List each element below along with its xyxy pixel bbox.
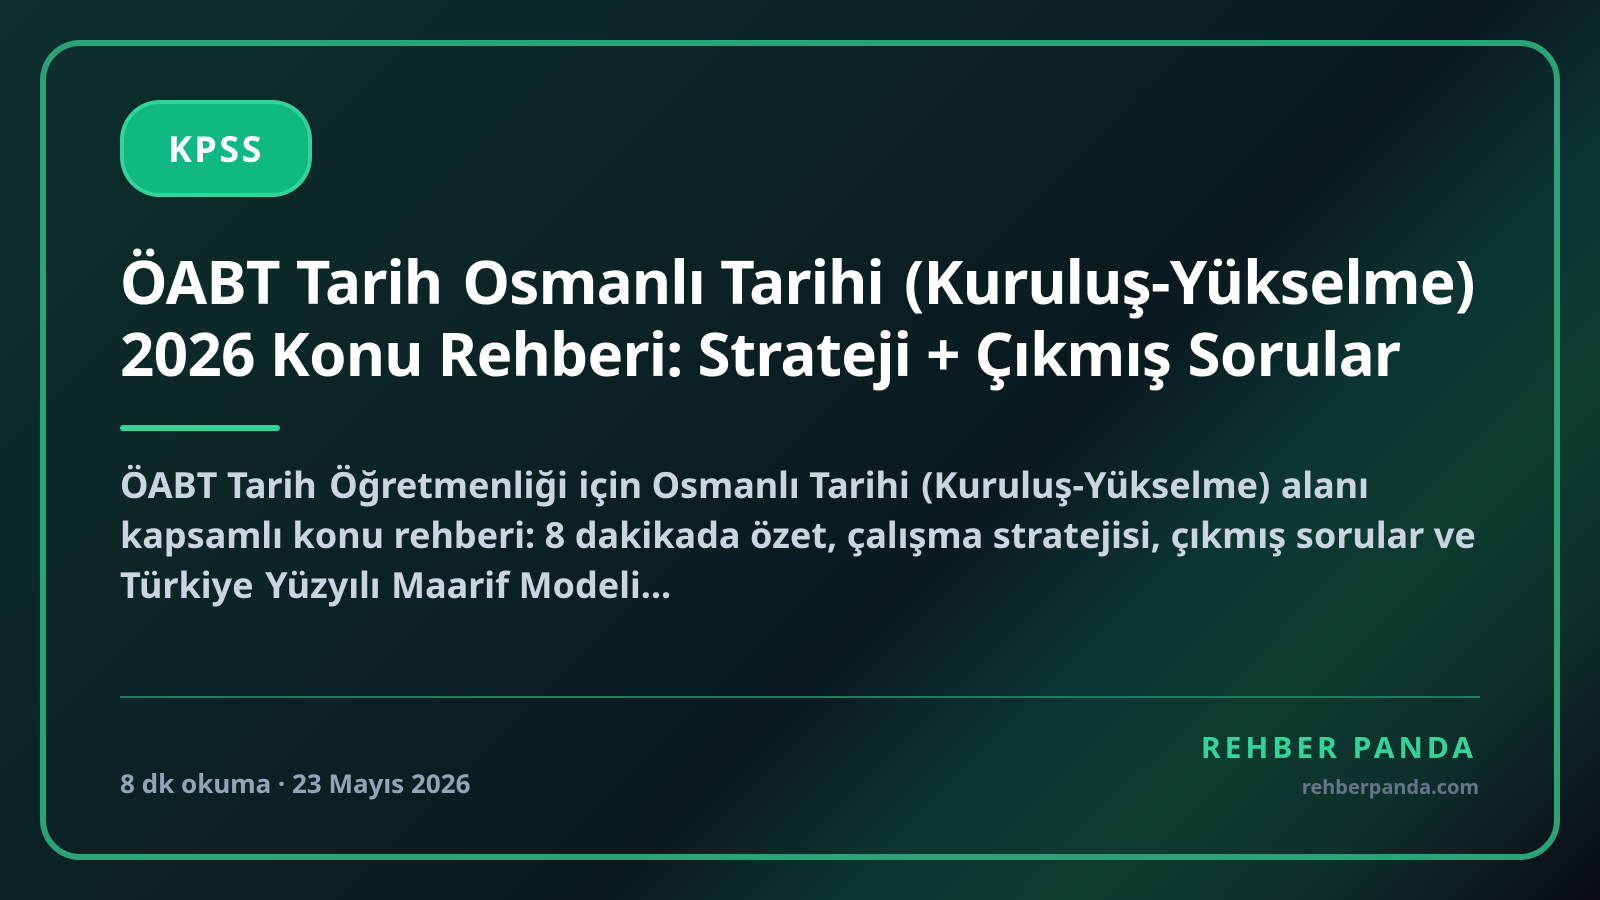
title (120, 240, 1475, 394)
website: rehberpanda.com (1302, 773, 1479, 800)
title: 2026 Konu Rehberi: Strateji + Çıkmış Sorular (120, 312, 1400, 394)
title: ÖABT Tarih Osmanlı Tarihi (Kuruluş-Yükselme) (120, 240, 1475, 322)
footer rule (120, 696, 1480, 698)
badge: KPSS (120, 100, 312, 197)
reading time and date: 8 dk okuma · 23 Mayıs 2026 (120, 765, 470, 801)
description text (120, 460, 1476, 609)
description text: kapsamlı konu rehberi: 8 dakikada özet, çalışma stratejisi, çıkmış sorular ve (120, 510, 1476, 559)
brand name: REHBER PANDA (1201, 726, 1477, 767)
badge: KPSS: KPSS (168, 124, 264, 173)
accent divider (120, 425, 280, 431)
description text: ÖABT Tarih Öğretmenliği için Osmanlı Tarihi (Kuruluş-Yükselme) alanı (120, 460, 1369, 509)
description text: Türkiye Yüzyılı Maarif Modeli... (120, 560, 671, 609)
